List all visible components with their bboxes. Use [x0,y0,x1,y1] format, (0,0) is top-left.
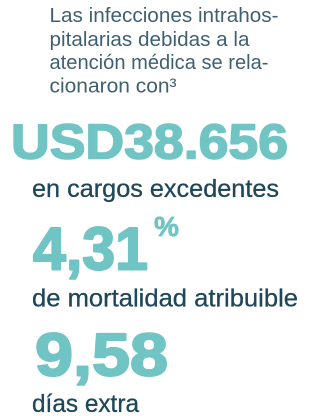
stat: attributable mortality: de mortalidad atribuible [32,284,298,312]
intro text block: atención médica se rela- [50,51,268,74]
intro text block: pitalarias debidas a la [50,28,250,51]
intro text block [50,4,278,98]
stat: excess charges [11,115,288,203]
stat: attributable mortality [32,211,298,312]
intro text block: cionaron con³ [50,74,177,98]
stat: excess charges: en cargos excedentes [32,175,279,203]
intro text block: Las infecciones intrahos- [50,4,278,27]
stat: extra days: 9,58 [35,321,168,388]
stat: extra days [32,321,168,416]
stat: attributable mortality: % [154,211,179,242]
stat: excess charges: USD38.656 [11,115,288,169]
stat: attributable mortality: 4,31 [33,215,148,282]
